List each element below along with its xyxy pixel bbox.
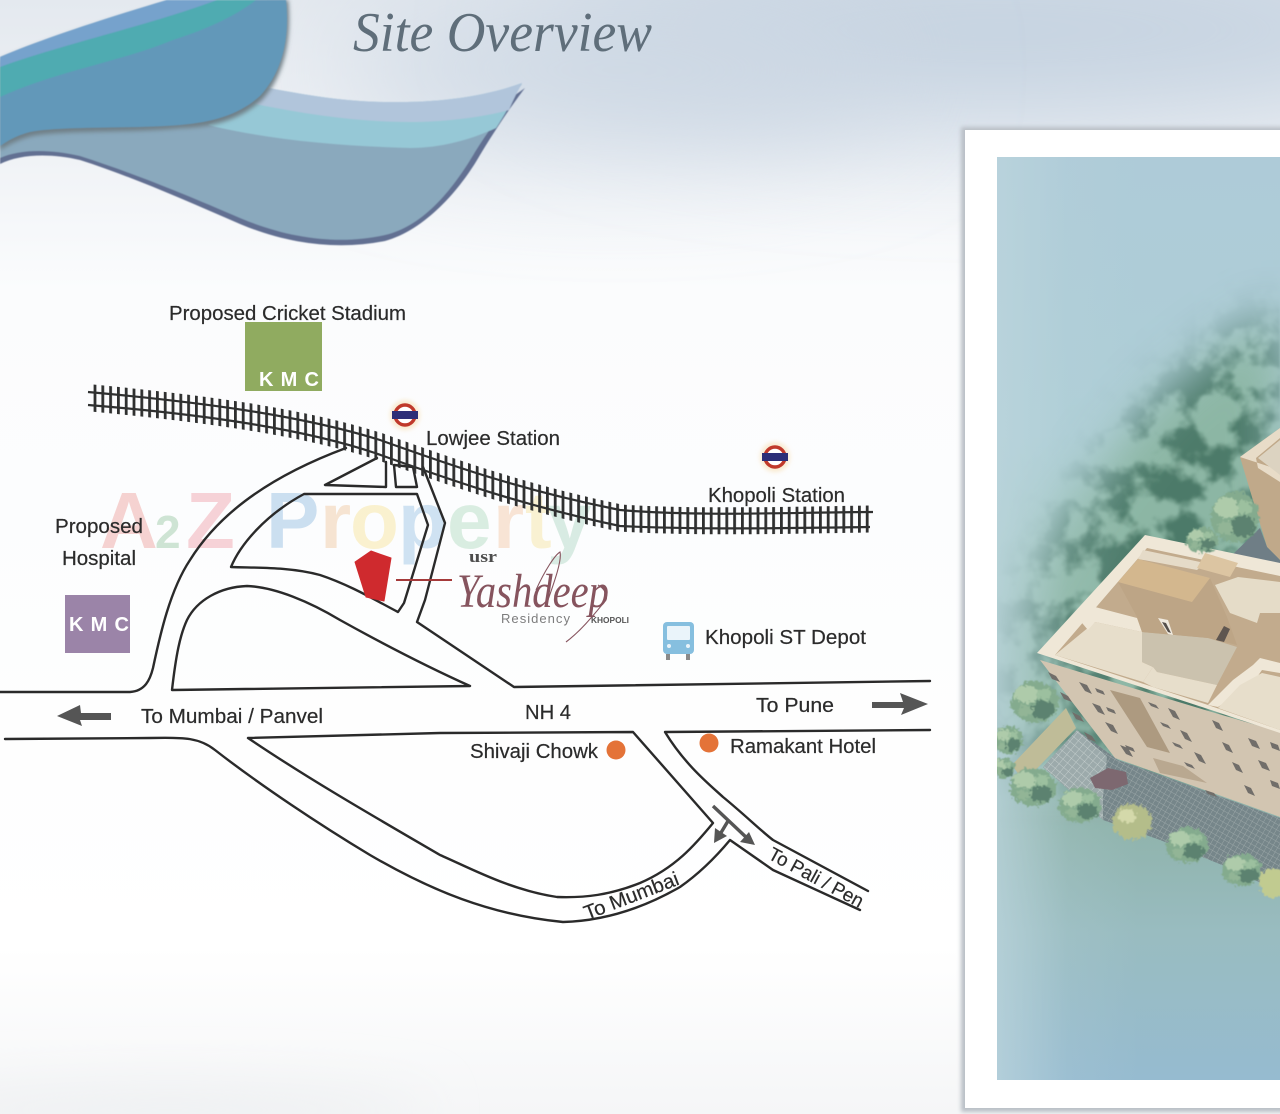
watermark: A2Z Property: y	[547, 476, 592, 565]
paved driveway	[1043, 730, 1280, 892]
hospital box: KMC	[69, 614, 129, 636]
swoosh: back ribbon	[0, 83, 525, 245]
watermark: A2Z Property: A	[100, 476, 158, 565]
watermark: A2Z Property	[100, 476, 592, 565]
stadium box	[245, 322, 322, 391]
label: To Pune: To Pune	[756, 695, 834, 717]
marker: Ramakant Hotel	[700, 734, 718, 752]
road: block beside link	[172, 586, 470, 690]
road map	[0, 448, 930, 922]
label: Shivaji Chowk: Shivaji Chowk	[470, 741, 599, 763]
road: NH 4 south edge east and Pali road	[665, 730, 930, 891]
left slab parapet	[1077, 607, 1142, 632]
label: Proposed Hospital: Proposed	[55, 516, 143, 538]
watermark: A2Z Property: e	[447, 476, 492, 565]
upper roof strip	[1138, 550, 1205, 570]
label: Proposed Hospital	[55, 516, 143, 570]
aerial rendering of residency	[997, 157, 1280, 1080]
title: Site Overview	[353, 2, 652, 64]
parked car	[1090, 768, 1128, 790]
arrow: to Pune	[872, 693, 928, 715]
logo: Yashdeep Residency: Residency	[501, 611, 571, 626]
icon: Lowjee station	[390, 400, 420, 430]
panel shadow	[961, 127, 1280, 1112]
watermark: A2Z Property: r	[320, 476, 351, 565]
label: To Mumbai road: To Mumbai	[581, 868, 682, 925]
label: To Mumbai / Panvel: To Mumbai / Panvel	[141, 706, 323, 728]
project location marker	[355, 551, 452, 601]
watermark: A2Z Property: t	[525, 476, 552, 565]
lower right slab	[1218, 673, 1280, 730]
rooftop box	[1197, 553, 1238, 577]
forest	[998, 294, 1280, 795]
label: Ramakant Hotel: Ramakant Hotel	[730, 736, 876, 758]
watermark: A2Z Property: r	[493, 476, 524, 565]
stadium box: KMC	[259, 369, 319, 391]
roof interior walls	[1055, 548, 1280, 730]
icon: Khopoli station	[760, 442, 790, 472]
facade balcony recess	[1110, 690, 1207, 783]
label: NH 4: NH 4	[525, 702, 571, 724]
watermark: A2Z Property: p	[398, 476, 447, 565]
watermark: A2Z Property: o	[350, 476, 399, 565]
compound wall	[1012, 708, 1076, 782]
parking beside second building	[1230, 528, 1280, 566]
panel frame	[965, 130, 1280, 1108]
logo: Yashdeep Residency: KHOPOLI	[591, 616, 629, 625]
watermark: A2Z Property: P	[266, 476, 319, 565]
right slab parapet	[1208, 658, 1280, 707]
label: Khopoli ST Depot: Khopoli ST Depot	[705, 627, 866, 649]
arrow: to Mumbai	[57, 705, 111, 726]
second building	[1240, 428, 1280, 560]
road: NH 4 north edge west and link to station	[0, 448, 346, 692]
facade windows	[1048, 672, 1280, 797]
label: Lowjee Station: Lowjee Station	[426, 428, 560, 450]
stadium label: Proposed Cricket Stadium	[169, 303, 406, 325]
right roof slab	[1215, 577, 1280, 623]
shaded terrace	[1142, 632, 1237, 685]
road: NH 4 south edge inner curve	[248, 732, 713, 897]
arrows: junction split	[713, 806, 755, 845]
swoosh: front ribbon	[0, 0, 289, 150]
watermark: A2Z Property: Z	[186, 476, 235, 565]
main building facade	[1040, 660, 1280, 817]
road: triangle block near station	[325, 458, 386, 487]
logo: Yashdeep Residency: usr	[469, 547, 498, 566]
left roof slab	[1055, 622, 1153, 682]
stair tower	[1118, 559, 1237, 645]
label: Proposed Hospital: Hospital	[62, 548, 136, 570]
icon: bus	[663, 622, 694, 660]
bright terrace strip	[1143, 667, 1217, 703]
road: east side and NH 4 north edge	[417, 467, 930, 687]
decorative swoosh	[0, 0, 525, 245]
roof parapet	[1037, 535, 1280, 733]
label: To Pali / Pen: To Pali / Pen	[765, 844, 867, 912]
hospital box	[65, 595, 130, 653]
watermark: A2Z Property: 2	[155, 506, 181, 558]
trees	[993, 491, 1280, 898]
road: project block	[231, 494, 428, 612]
logo: Yashdeep Residency	[457, 547, 629, 642]
photo panel	[961, 127, 1280, 1112]
marker: Shivaji Chowk	[606, 740, 626, 760]
label: Khopoli Station: Khopoli Station	[708, 485, 845, 507]
road: NH 4 south edge west and outer curve	[5, 738, 860, 922]
logo: Yashdeep Residency: Yashdeep	[457, 565, 609, 618]
road: small block near station	[394, 465, 417, 487]
railway line	[88, 392, 873, 528]
